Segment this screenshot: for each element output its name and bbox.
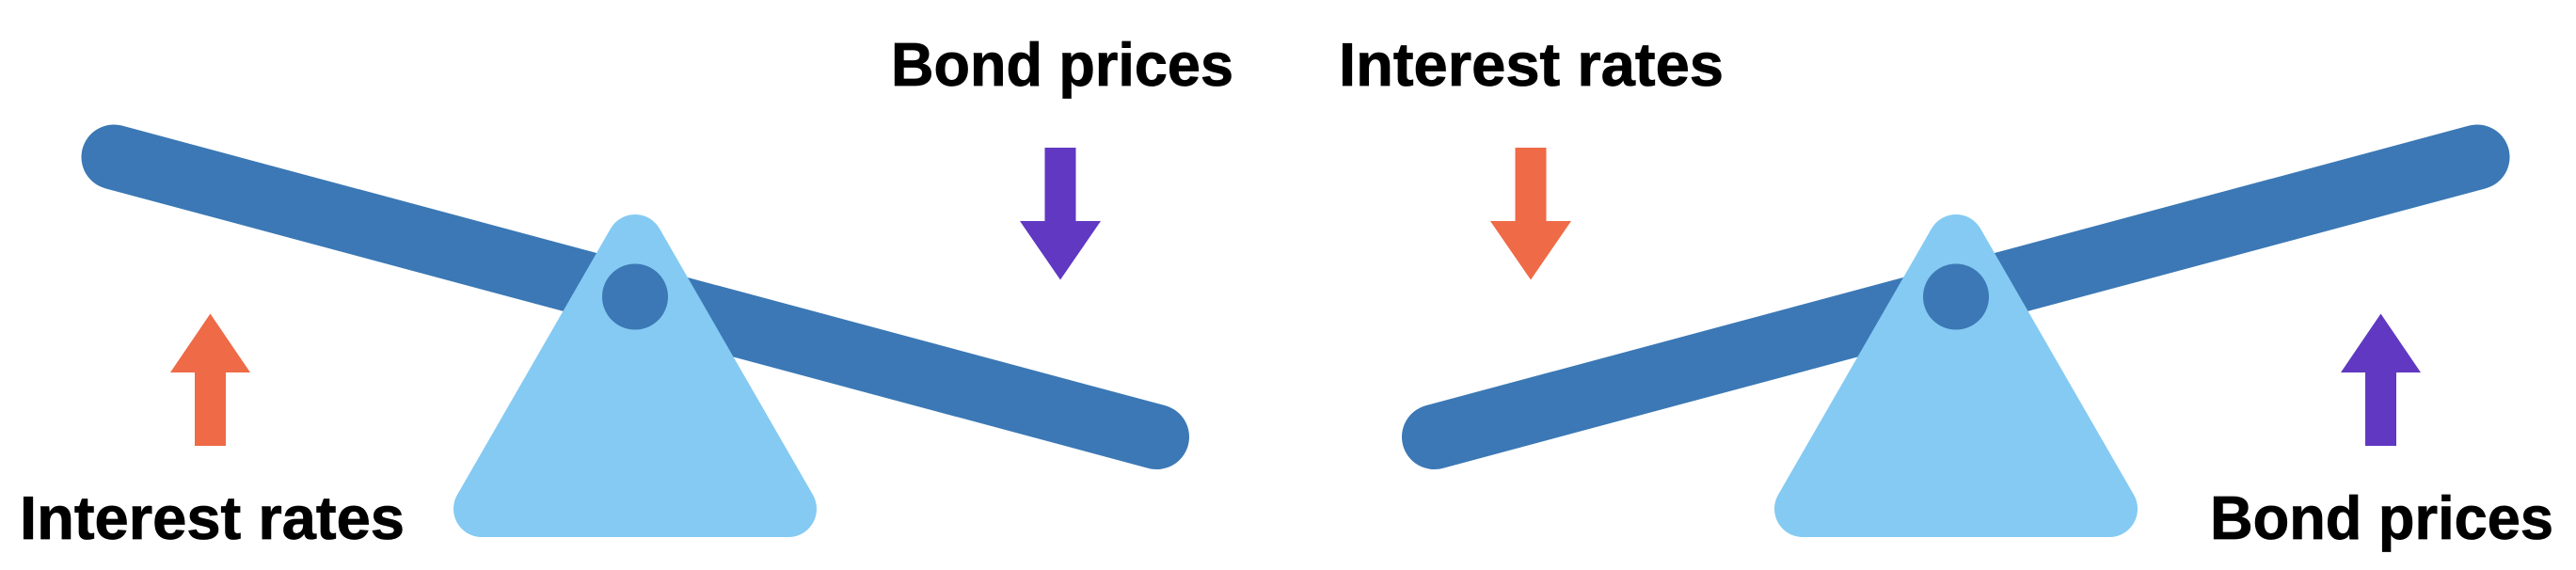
seesaw beam tilted up to the right — [1434, 157, 2477, 436]
seesaw triangular base — [482, 243, 788, 509]
arrow: bond prices down — [1020, 148, 1101, 280]
label: bond prices: Bond prices — [2210, 483, 2553, 552]
arrow: interest rates up — [170, 314, 250, 446]
label: bond prices: Bond prices — [891, 30, 1233, 99]
panel: left seesaw, interest rates up and bond prices down — [20, 30, 1233, 552]
label: interest rates: Interest rates — [1339, 30, 1724, 99]
seesaw pivot circle — [602, 263, 668, 329]
arrow: interest rates down — [1490, 148, 1571, 280]
label: interest rates: Interest rates — [20, 483, 405, 552]
arrow: bond prices up — [2341, 314, 2421, 446]
seesaw beam tilted down to the right — [114, 157, 1157, 436]
seesaw pivot circle — [1923, 263, 1989, 329]
panel: right seesaw, interest rates down and bond prices up — [1339, 30, 2553, 552]
seesaw triangular base — [1803, 243, 2109, 509]
